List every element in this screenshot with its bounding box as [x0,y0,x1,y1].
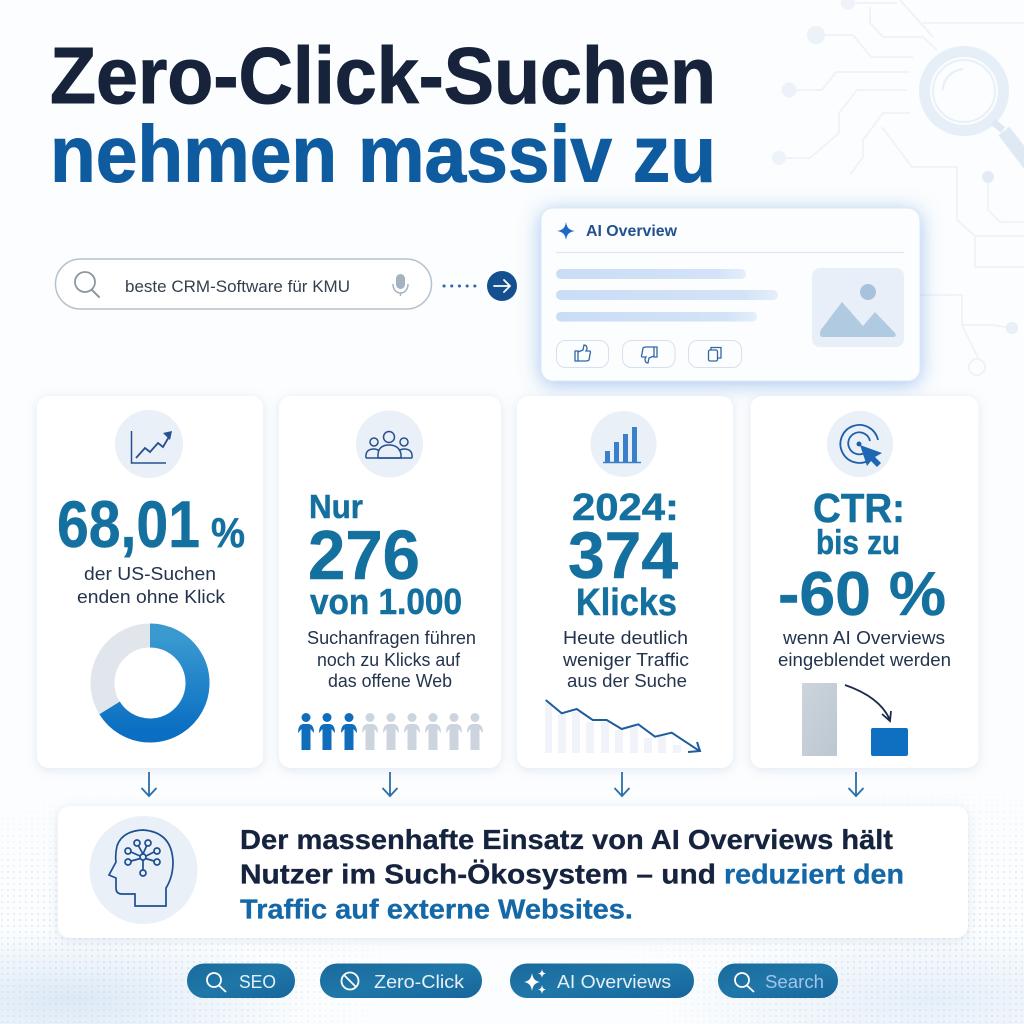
background dot wave [0,790,1024,1024]
summary text [240,824,904,924]
statistic: CTR: [813,485,905,531]
summary text: Nutzer im Such-Ökosystem – und [240,858,716,890]
description [77,564,226,607]
panel: CTR -60 % [750,396,978,768]
tag: AI Overviews: AI Overviews [557,972,671,992]
statistic: -60 % [778,560,946,629]
description: noch zu Klicks auf [317,650,461,670]
tag: Zero-Click [320,964,482,998]
statistic: Klicks [576,582,677,624]
statistic [778,485,946,629]
icon: head with network [90,816,198,924]
statistic: von 1.000 [310,581,462,622]
statistic: Nur [309,488,363,525]
statistic [308,488,462,622]
panel: 374 Klicks [517,396,733,768]
description: wenn AI Overviews [782,628,945,648]
statistic [568,487,679,624]
tag: Search: Search [765,972,824,992]
panel: 276 von 1.000 [279,396,501,768]
statistic: 68,01 [57,487,200,561]
panel: AI Overview [541,208,920,381]
summary text: reduziert den [724,858,904,890]
tag: Search [718,964,838,998]
title: nehmen massiv zu [50,110,716,198]
description: eingeblendet werden [778,650,951,670]
arrow: card 2 to summary [382,772,398,796]
title [50,31,716,198]
icon: target with cursor [827,411,893,477]
background circuit and magnifier [772,0,1024,375]
description: der US-Suchen [84,564,216,584]
summary text: Traffic auf externe Websites. [240,894,633,924]
tag: Zero-Click: Zero-Click [374,972,465,992]
statistic: 276 [308,516,420,594]
statistic: bis zu [816,524,900,562]
arrow: card 4 to summary [848,772,864,796]
title: Zero-Click-Suchen [50,31,716,120]
arrow from search to AI overview [444,271,517,301]
description: Suchanfragen führen [307,628,476,648]
search bar [56,259,432,309]
summary text: Der massenhafte Einsatz von AI Overviews hält [240,824,893,855]
tag: SEO [187,964,295,998]
panel: AI Overview: AI Overview [586,223,678,240]
icon: people [356,410,423,478]
description: weniger Traffic [562,650,689,670]
description [778,628,951,670]
donut chart [102,635,198,731]
description: Heute deutlich [563,628,688,648]
panel: summary [58,806,968,938]
before-after bars [802,683,908,756]
arrow: card 1 to summary [142,772,156,796]
description: das offene Web [328,671,452,691]
statistic: % [211,509,245,556]
description: enden ohne Klick [77,587,226,607]
description: aus der Suche [567,671,687,691]
tag: SEO: SEO [239,972,276,992]
description [307,628,476,691]
icon: bar chart [590,411,656,477]
description [562,628,689,691]
declining line chart [545,700,700,753]
tag: AI Overviews [510,964,694,998]
statistic: 2024: [572,487,679,529]
arrow: card 3 to summary [614,772,630,796]
pictogram: people row [298,713,483,750]
icon: line chart [115,410,183,478]
search bar: beste CRM-Software für KMU [125,277,350,296]
panel: 68,01 % [37,396,263,768]
statistic: 374 [568,518,678,592]
